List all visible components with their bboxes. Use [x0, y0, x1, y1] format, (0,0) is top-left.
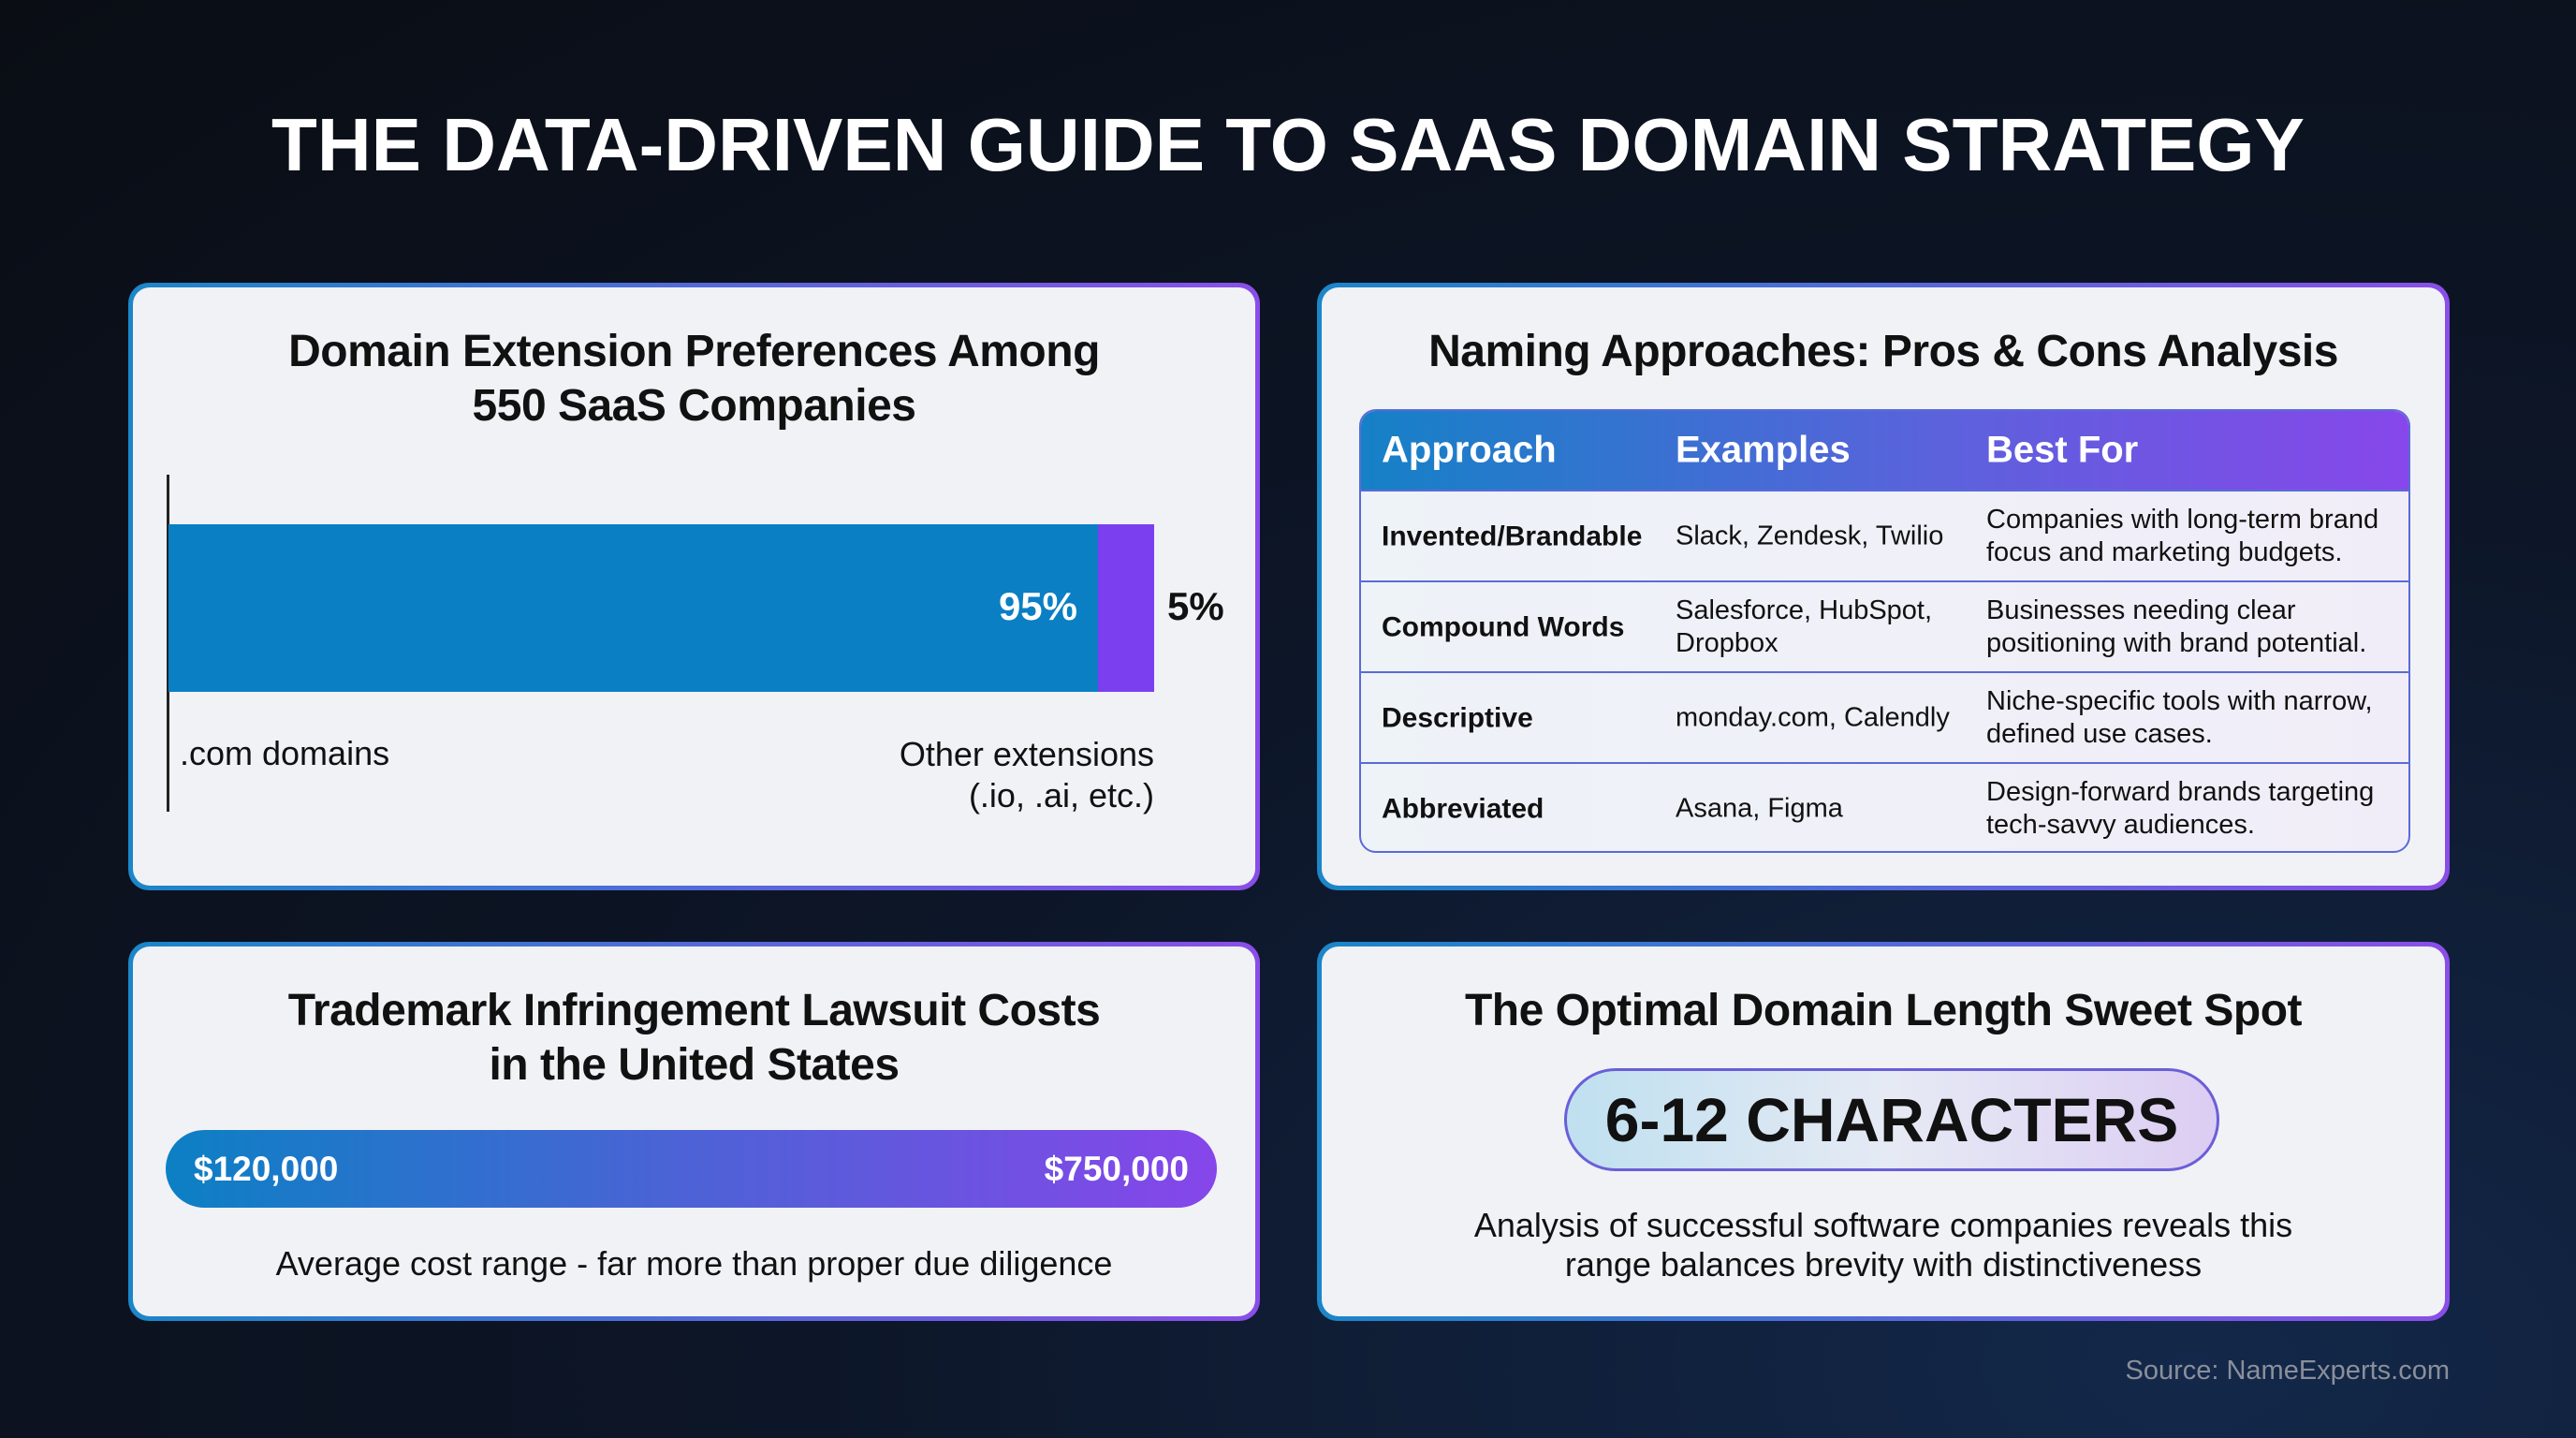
row: compound: Businesses needing clear — [1986, 595, 2295, 625]
value label 5%: 5% — [1167, 584, 1224, 628]
row: invented: Slack, Zendesk, Twilio — [1676, 521, 1943, 550]
panel: naming approaches — [1317, 283, 2450, 890]
table header: Examples — [1676, 429, 1851, 470]
bar chart — [167, 475, 1224, 814]
value label 95%: 95% — [999, 584, 1077, 628]
row: compound: positioning with brand potential. — [1986, 627, 2366, 657]
table header: Approach — [1382, 429, 1557, 470]
panel: optimal domain length — [1317, 942, 2450, 1321]
row: descriptive: monday.com, Calendly — [1676, 702, 1950, 732]
range bar — [166, 1130, 1217, 1208]
row: compound: Compound Words — [1382, 611, 1624, 642]
bar: other 5% — [1098, 524, 1154, 692]
row: abbreviated — [1361, 762, 2408, 853]
row: compound: Dropbox — [1676, 627, 1778, 657]
min value: $120,000 — [194, 1150, 338, 1188]
pill: 6-12 characters: 6-12 CHARACTERS — [1605, 1085, 2178, 1154]
row: abbreviated: Asana, Figma — [1676, 793, 1843, 823]
panel heading — [288, 327, 1100, 431]
panel heading: 550 SaaS Companies — [473, 381, 915, 431]
label other — [900, 735, 1154, 814]
panel heading: in the United States — [489, 1040, 900, 1090]
panel heading: Domain Extension Preferences Among — [288, 327, 1100, 376]
caption — [1474, 1206, 2292, 1284]
label other: Other extensions — [900, 735, 1154, 773]
title: THE DATA-DRIVEN GUIDE TO SAAS DOMAIN STRATEGY — [271, 103, 2305, 186]
caption: Average cost range - far more than proper due diligence — [276, 1244, 1112, 1283]
panel heading: The Optimal Domain Length Sweet Spot — [1465, 986, 2302, 1035]
table — [1359, 409, 2410, 853]
bar: .com 95% — [168, 524, 1098, 692]
source: Source: NameExperts.com — [2125, 1356, 2450, 1386]
row: descriptive: defined use cases. — [1986, 719, 2213, 749]
row: invented: Invented/Brandable — [1382, 521, 1642, 551]
row: invented — [1361, 490, 2408, 580]
row: descriptive: Niche-specific tools with narrow, — [1986, 685, 2373, 715]
max value: $750,000 — [1045, 1150, 1189, 1188]
row: descriptive: Descriptive — [1382, 702, 1533, 733]
table header: Best For — [1986, 429, 2138, 470]
panel heading: Naming Approaches: Pros & Cons Analysis — [1428, 327, 2338, 376]
panel heading: Trademark Infringement Lawsuit Costs — [288, 986, 1100, 1035]
pill: 6-12 characters — [1564, 1068, 2219, 1171]
panel heading — [288, 986, 1100, 1090]
axis — [167, 475, 169, 812]
panel: domain extension preferences — [128, 283, 1260, 890]
row: invented: Companies with long-term brand — [1986, 504, 2378, 534]
row: compound — [1361, 580, 2408, 671]
row: compound: Salesforce, HubSpot, — [1676, 595, 1932, 625]
label .com: .com domains — [180, 734, 389, 772]
row: descriptive — [1361, 671, 2408, 762]
row: abbreviated: Design-forward brands targeting — [1986, 777, 2374, 807]
row: abbreviated: Abbreviated — [1382, 793, 1544, 824]
row: invented: focus and marketing budgets. — [1986, 537, 2342, 567]
panel: trademark lawsuit costs — [128, 942, 1260, 1321]
table header — [1361, 411, 2408, 490]
label other: (.io, .ai, etc.) — [969, 776, 1154, 814]
row: abbreviated: tech-savvy audiences. — [1986, 809, 2255, 839]
caption: range balances brevity with distinctiveness — [1565, 1245, 2202, 1284]
caption: Analysis of successful software companies reveals this — [1474, 1206, 2292, 1244]
